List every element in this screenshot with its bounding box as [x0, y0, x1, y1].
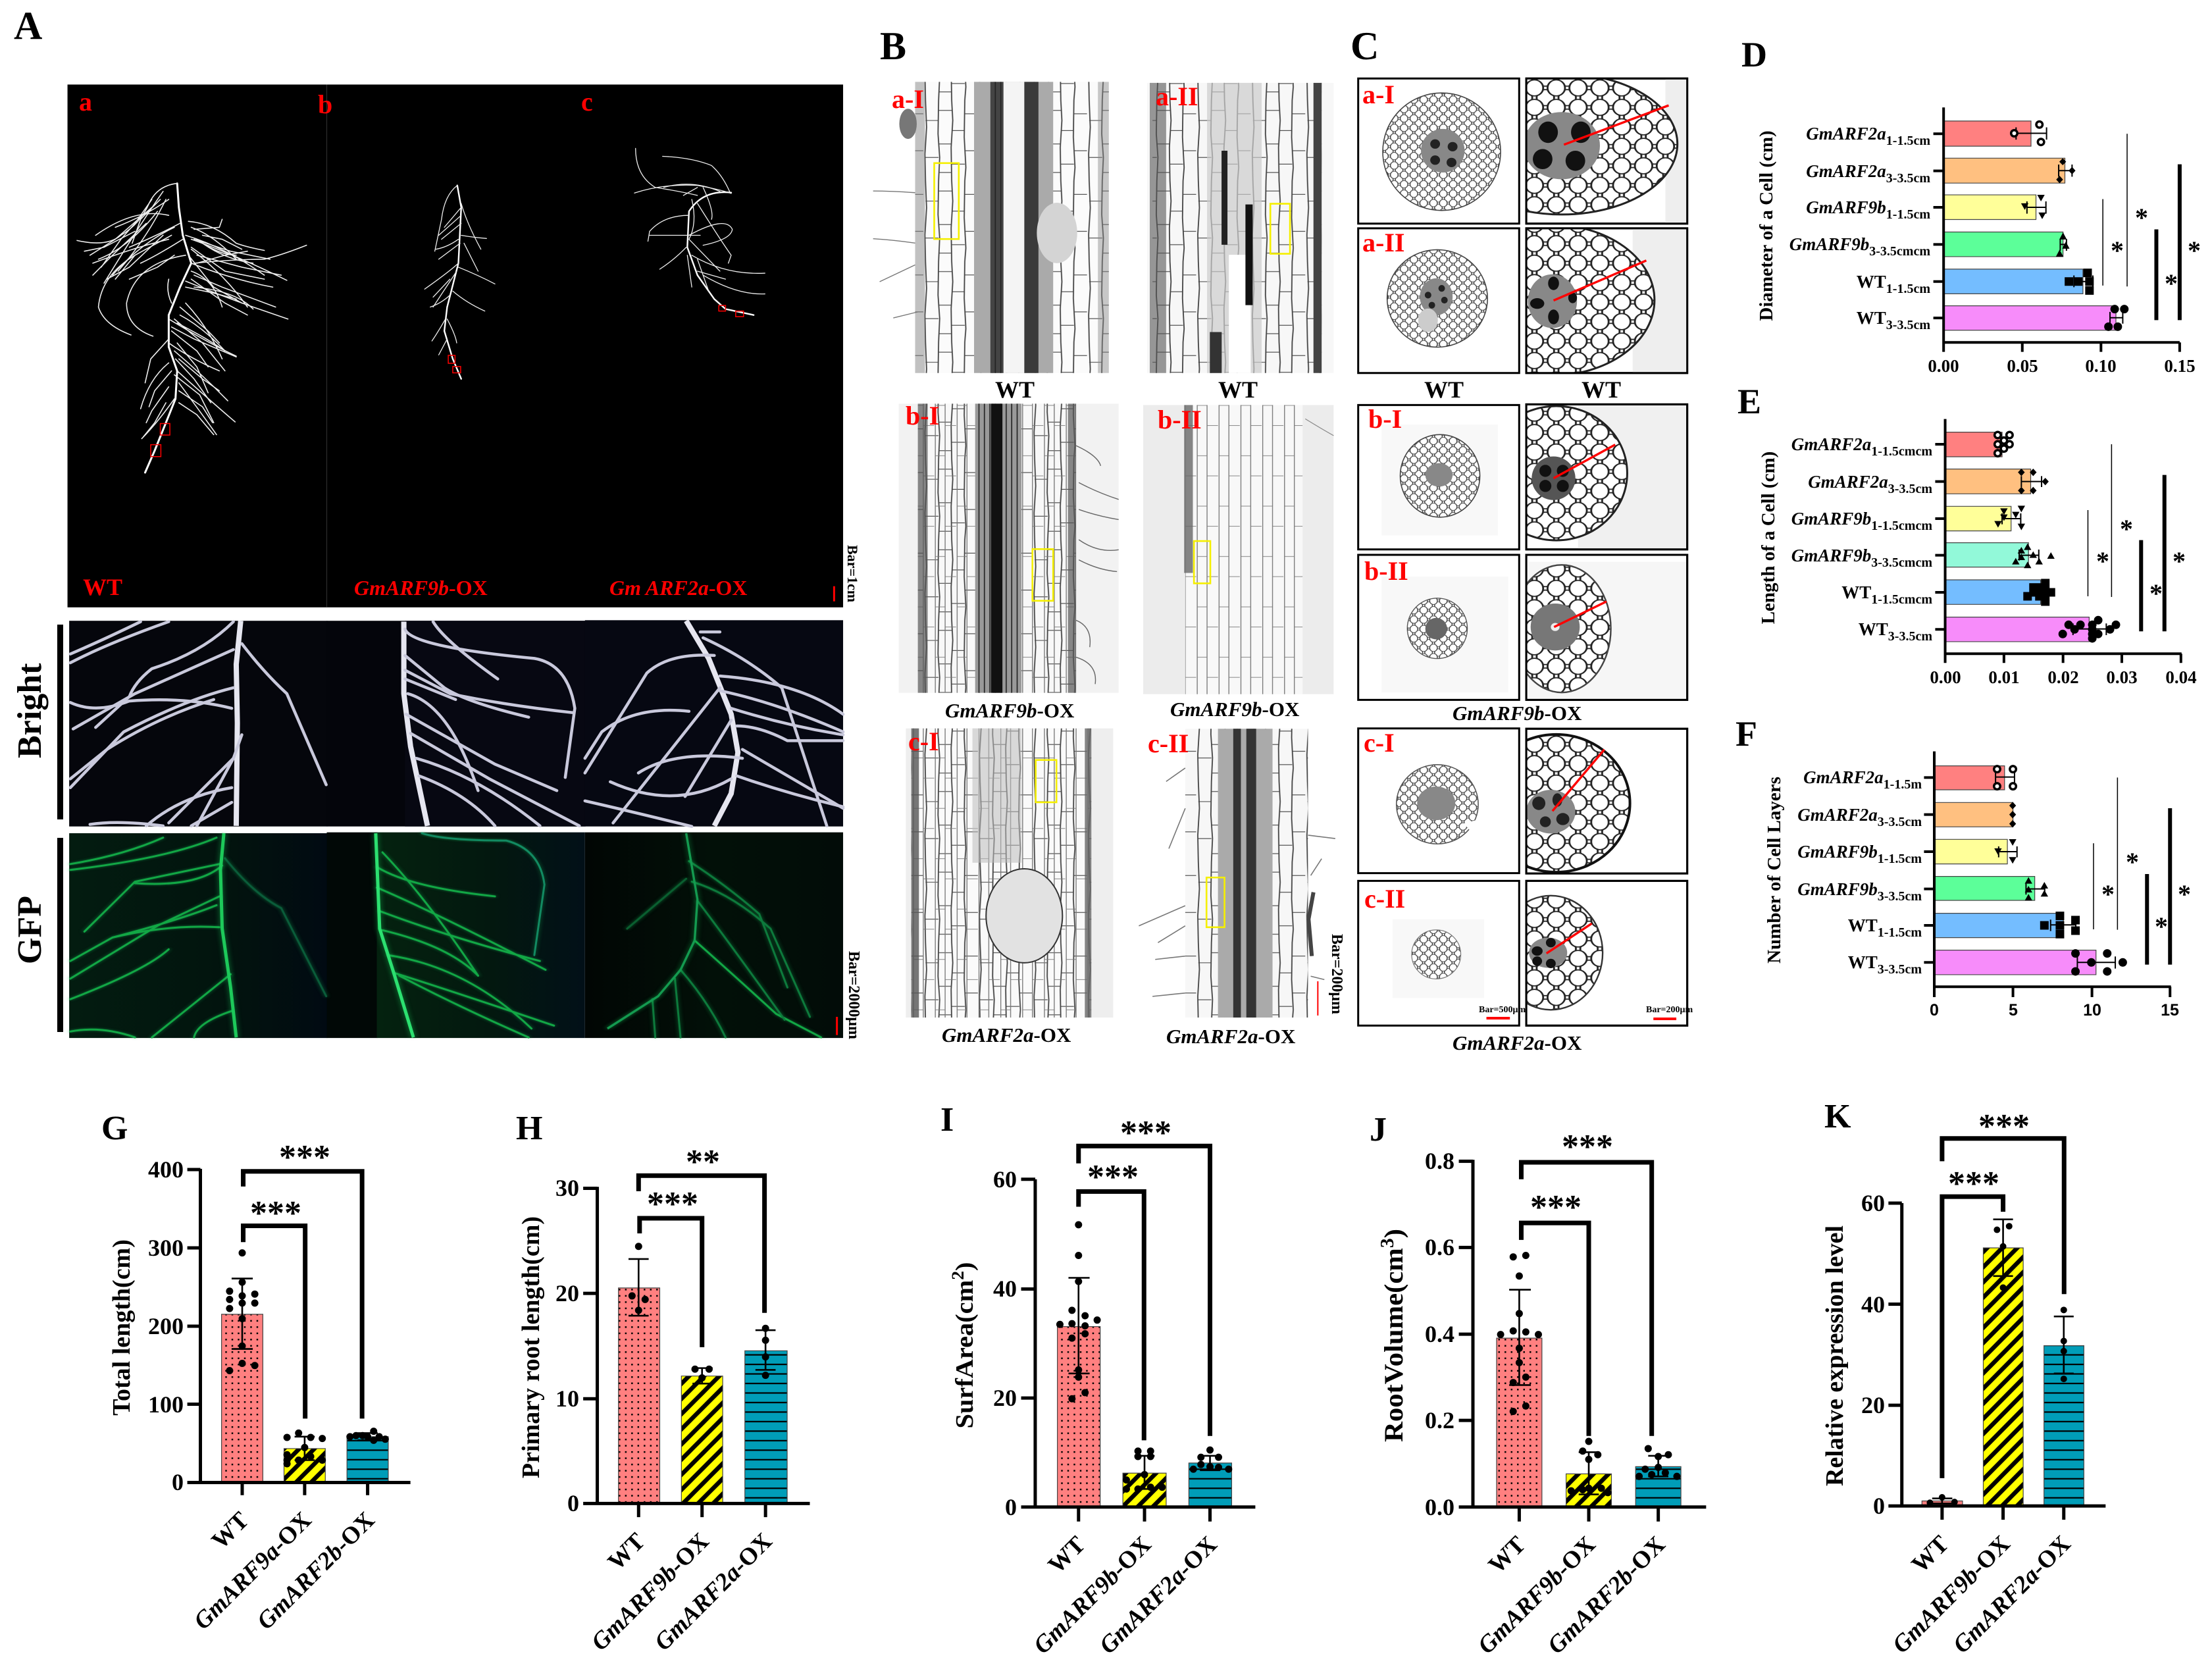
significance stars: **	[686, 1143, 720, 1181]
category and tick labels: 1-1.5cm	[1878, 925, 1922, 940]
category and tick labels: GmARF2a	[1797, 805, 1878, 825]
tick labels: 60	[993, 1166, 1017, 1193]
category labels: GmARF9b-OX	[1888, 1530, 2016, 1659]
section labels: a-II	[1156, 82, 1198, 111]
tick labels: 30	[555, 1175, 579, 1201]
axis title: SurfArea(cm	[951, 1289, 979, 1428]
category and tick labels: 1-1.5cmcm	[1871, 444, 1932, 459]
significance stars: *	[2135, 203, 2148, 232]
significance stars	[647, 1143, 720, 1223]
scan sub-labels: GmARF9b-OX	[354, 576, 488, 600]
category labels: WT	[1043, 1531, 1091, 1579]
x tick labels: 10	[2083, 1001, 2101, 1019]
section labels: Bar=200μm	[1328, 934, 1345, 1014]
section a-I and a-II	[873, 82, 1333, 373]
chart I: surface area	[948, 1114, 1255, 1659]
category labels: GmARF2a-OX	[1094, 1531, 1223, 1659]
significance stars	[1530, 1128, 1613, 1226]
category and tick labels: 3-3.5cmcm	[1869, 244, 1930, 259]
column labels: WT	[1424, 376, 1464, 403]
category and tick labels: 1-1.5m	[1884, 777, 1922, 792]
panel letter E: E	[1737, 382, 1761, 421]
tick labels	[1425, 1148, 1454, 1520]
tick labels: 0.2	[1425, 1407, 1454, 1433]
panel letter F: F	[1736, 714, 1757, 754]
category and tick labels: 3-3.5cm	[1878, 889, 1922, 904]
section labels: GmARF9b-OX	[945, 699, 1075, 722]
axis title: )	[951, 1262, 979, 1271]
panel A: root scans	[68, 84, 861, 607]
category and tick labels	[1791, 434, 2197, 687]
section labels: c-II	[1148, 729, 1189, 758]
tick labels: 10	[555, 1385, 579, 1412]
category and tick labels: WT	[1857, 272, 1886, 292]
panel letter B: B	[880, 24, 906, 68]
category and tick labels: GmARF2a	[1806, 161, 1886, 181]
category and tick labels: 3-3.5cm	[1888, 482, 1932, 496]
axis title: Length of a Cell (cm)	[1758, 452, 1779, 624]
category and tick labels: 1-1.5cmcm	[1871, 592, 1932, 607]
scan background	[68, 84, 843, 607]
category and tick labels: GmARF9b	[1797, 842, 1878, 862]
section labels: c-I	[908, 727, 939, 756]
significance stars	[2111, 203, 2201, 298]
panel B: longitudinal root sections, middle and lower	[899, 401, 1345, 1048]
column labels	[1362, 80, 1621, 403]
tick labels: 0.0	[1425, 1494, 1454, 1520]
category and tick labels: 1-1.5cmcm	[1871, 519, 1932, 533]
significance stars: ***	[279, 1139, 330, 1176]
tick labels: 20	[1861, 1392, 1885, 1418]
significance stars	[1087, 1114, 1171, 1196]
significance stars	[2101, 847, 2191, 941]
category and tick labels: 0.01	[1988, 667, 2020, 687]
tick labels: 0.4	[1425, 1321, 1454, 1347]
chart D: diameter of a cell	[1756, 107, 2201, 376]
scan sub-labels: a	[79, 87, 92, 116]
chart K: relative expression	[1821, 1108, 2105, 1659]
panel C: root cross sections, OX lines	[1358, 404, 1693, 1054]
panel B: longitudinal root sections, upper	[873, 82, 1333, 403]
significance stars: ***	[1530, 1189, 1582, 1226]
tick labels	[148, 1156, 184, 1495]
x tick labels	[1930, 1001, 2179, 1019]
chart J: root volume	[1377, 1128, 1706, 1659]
category and tick labels: GmARF2a	[1806, 124, 1886, 143]
category and tick labels: GmARF2a	[1791, 434, 1871, 454]
axis title: Relative expression level	[1821, 1226, 1849, 1486]
significance stars: ***	[647, 1185, 698, 1223]
category labels	[1473, 1531, 1671, 1659]
category labels: GmARF9b-OX	[1473, 1531, 1601, 1659]
category and tick labels: WT	[1841, 582, 1871, 602]
panel letter K: K	[1824, 1098, 1851, 1135]
bars, points and axes	[1934, 107, 2180, 352]
tick labels: 0	[567, 1490, 579, 1516]
category and tick labels: GmARF2a	[1803, 767, 1884, 787]
panel C: root cross sections, WT	[1358, 74, 1687, 403]
significance stars: ***	[1978, 1108, 2030, 1145]
bars, points and axes	[188, 1169, 411, 1495]
category labels: WT	[1907, 1530, 1955, 1578]
category and tick labels: 0.03	[2106, 667, 2138, 687]
category labels: WT	[207, 1507, 255, 1555]
side labels: GFP	[11, 896, 49, 964]
section labels	[892, 82, 1258, 403]
panel letter J: J	[1370, 1111, 1387, 1148]
category and tick labels: 3-3.5cm	[1888, 629, 1932, 644]
section labels: GmARF2a-OX	[942, 1023, 1071, 1046]
bars, points and axes	[1459, 1160, 1706, 1522]
category and tick labels: 3-3.5cm	[1878, 815, 1922, 829]
category and tick labels: 3-3.5cm	[1886, 171, 1930, 186]
significance stars: ***	[1120, 1114, 1171, 1152]
sections a-I and a-II	[1358, 74, 1687, 376]
category labels: WT	[1483, 1531, 1531, 1579]
category and tick labels: WT	[1848, 916, 1878, 935]
sections b and c	[1358, 404, 1687, 1025]
significance stars: *	[2178, 879, 2191, 909]
column labels: a-I	[1362, 80, 1395, 109]
section labels: Bar=200μm	[1646, 1005, 1693, 1015]
axis title: Primary root length(cm)	[517, 1216, 545, 1478]
significance stars: ***	[1562, 1128, 1613, 1166]
chart F: number of cell layers	[1764, 752, 2191, 1019]
bars, points and axes	[1924, 752, 2171, 997]
significance stars: *	[2165, 269, 2178, 298]
panel letter D: D	[1741, 35, 1767, 74]
section labels: Bar=500μm	[1479, 1005, 1526, 1015]
section labels: b-I	[1368, 404, 1402, 434]
category labels: GmARF2a-OX	[650, 1528, 778, 1656]
panel A: Bright and GFP images	[11, 620, 862, 1039]
significance stars: *	[2155, 912, 2168, 941]
chart H: primary root length	[517, 1143, 810, 1656]
significance stars: *	[2096, 546, 2109, 576]
section labels: GmARF2a-OX	[1166, 1025, 1296, 1048]
category and tick labels: 3-3.5cmcm	[1871, 555, 1932, 570]
tick labels: 200	[148, 1313, 184, 1339]
category and tick labels: 0.00	[1928, 356, 1959, 376]
x tick labels: 15	[2161, 1001, 2179, 1019]
scan sub-labels	[79, 87, 748, 600]
significance stars: ***	[1087, 1158, 1139, 1196]
section labels: c-II	[1364, 884, 1405, 914]
x tick labels: 5	[2009, 1001, 2018, 1019]
category and tick labels: WT	[1857, 308, 1886, 328]
bars, points and axes	[1935, 419, 2182, 663]
side labels	[11, 625, 63, 1032]
column labels: a-II	[1362, 228, 1404, 257]
tick labels: 100	[148, 1391, 184, 1418]
sections b and c	[899, 403, 1335, 1018]
category and tick labels: 1-1.5cm	[1886, 134, 1930, 148]
category and tick labels: GmARF9b	[1789, 234, 1869, 254]
category and tick labels: WT	[1848, 952, 1878, 972]
panel letter C: C	[1350, 24, 1379, 68]
category labels	[1029, 1531, 1223, 1659]
category labels: GmARF9b-OX	[586, 1528, 715, 1656]
scan sub-labels: b	[318, 90, 332, 119]
category labels: GmARF2a-OX	[1948, 1530, 2076, 1659]
category and tick labels: 3-3.5cm	[1886, 318, 1930, 332]
category labels: GmARF2b-OX	[252, 1507, 380, 1635]
section labels: b-II	[1158, 405, 1202, 434]
column labels: WT	[1582, 376, 1621, 403]
significance stars	[250, 1139, 330, 1232]
category and tick labels: GmARF9b	[1797, 879, 1878, 899]
panel letter H: H	[516, 1110, 542, 1147]
section labels: a-I	[892, 84, 924, 114]
category and tick labels: 0.00	[1930, 667, 1961, 687]
section labels: c-I	[1364, 728, 1395, 758]
significance stars: *	[2149, 579, 2163, 608]
scale label: Bar=1cm	[844, 545, 861, 602]
category and tick labels: GmARF9b	[1791, 546, 1871, 565]
category and tick labels: GmARF9b	[1791, 509, 1871, 529]
section labels: GmARF9b-OX	[1170, 698, 1300, 721]
category and tick labels: 0.15	[2164, 356, 2196, 376]
significance stars: *	[2101, 879, 2115, 909]
bars, points and axes	[1888, 1139, 2105, 1520]
significance stars: *	[2126, 847, 2139, 877]
significance stars: ***	[250, 1195, 301, 1232]
category and tick labels: GmARF9b	[1806, 197, 1886, 217]
significance stars	[1948, 1108, 2030, 1202]
significance stars: *	[2188, 236, 2201, 265]
bars, points and axes	[583, 1175, 810, 1517]
tick labels: 0	[172, 1469, 184, 1495]
tick labels	[555, 1175, 579, 1516]
tick labels: 40	[1861, 1291, 1885, 1318]
section labels: GmARF2a-OX	[1453, 1031, 1582, 1054]
scan sub-labels: WT	[83, 574, 122, 600]
category and tick labels: 1-1.5cm	[1886, 282, 1930, 296]
section labels: WT	[995, 376, 1035, 403]
axis title: Total length(cm)	[108, 1239, 136, 1416]
tick labels: 20	[993, 1385, 1017, 1411]
category and tick labels	[1789, 124, 2196, 376]
panel letter A: A	[14, 4, 42, 47]
category and tick labels: 1-1.5cm	[1886, 207, 1930, 222]
category labels: WT	[603, 1528, 651, 1576]
section labels: GmARF9b-OX	[1453, 702, 1582, 725]
axis title: 2	[948, 1271, 967, 1280]
axis title: Number of Cell Layers	[1764, 777, 1785, 964]
scan sub-labels: c	[581, 87, 593, 116]
axis title: Diameter of a Cell (cm)	[1756, 130, 1777, 321]
category labels: GmARF2b-OX	[1543, 1531, 1671, 1659]
category and tick labels: 3-3.5cm	[1878, 962, 1922, 977]
significance stars: *	[2173, 546, 2186, 576]
chart G: total length	[108, 1139, 411, 1635]
section labels: WT	[1218, 376, 1258, 403]
category and tick labels: 0.04	[2165, 667, 2197, 687]
section labels	[1364, 404, 1693, 1054]
x tick labels: 0	[1930, 1001, 1939, 1019]
chart E: length of a cell	[1758, 419, 2197, 687]
category labels: GmARF9a-OX	[189, 1507, 317, 1635]
section labels	[906, 401, 1345, 1048]
category and tick labels: GmARF2a	[1808, 472, 1888, 492]
category labels: GmARF9b-OX	[1029, 1531, 1157, 1659]
tick labels: 300	[148, 1235, 184, 1261]
category and tick labels: 0.02	[2047, 667, 2079, 687]
side labels: Bright	[11, 663, 49, 758]
significance stars: ***	[1948, 1165, 1999, 1202]
section labels: b-I	[906, 401, 939, 430]
root photographs	[69, 620, 843, 1038]
tick labels: 40	[993, 1276, 1017, 1302]
tick labels	[1861, 1190, 1885, 1519]
scale label: Bar=2000μm	[845, 951, 862, 1039]
category labels	[586, 1528, 778, 1656]
axis title: )	[1379, 1229, 1408, 1238]
tick labels	[993, 1166, 1017, 1520]
category and tick labels	[1797, 767, 1922, 977]
tick labels: 0	[1873, 1493, 1885, 1519]
tick labels: 0	[1005, 1494, 1017, 1520]
section labels: b-II	[1364, 556, 1408, 586]
category and tick labels: 1-1.5cm	[1878, 852, 1922, 866]
category labels	[189, 1507, 380, 1635]
panel letter G: G	[101, 1110, 128, 1147]
significance stars: *	[2111, 236, 2124, 265]
category and tick labels: WT	[1859, 619, 1888, 639]
bars, points and axes	[1021, 1146, 1255, 1522]
significance stars	[2096, 514, 2186, 608]
tick labels: 60	[1861, 1190, 1885, 1216]
tick labels: 400	[148, 1156, 184, 1183]
category labels	[1888, 1530, 2076, 1659]
tick labels: 0.8	[1425, 1148, 1454, 1174]
category and tick labels: 0.10	[2085, 356, 2117, 376]
axis title: 3	[1377, 1238, 1398, 1248]
significance stars: *	[2120, 514, 2133, 544]
tick labels: 0.6	[1425, 1234, 1454, 1260]
panel letter I: I	[940, 1101, 954, 1139]
tick labels: 20	[555, 1280, 579, 1306]
category and tick labels: 0.05	[2007, 356, 2038, 376]
axis title: RootVolume(cm	[1379, 1260, 1408, 1442]
scan sub-labels: Gm ARF2a-OX	[609, 576, 748, 600]
